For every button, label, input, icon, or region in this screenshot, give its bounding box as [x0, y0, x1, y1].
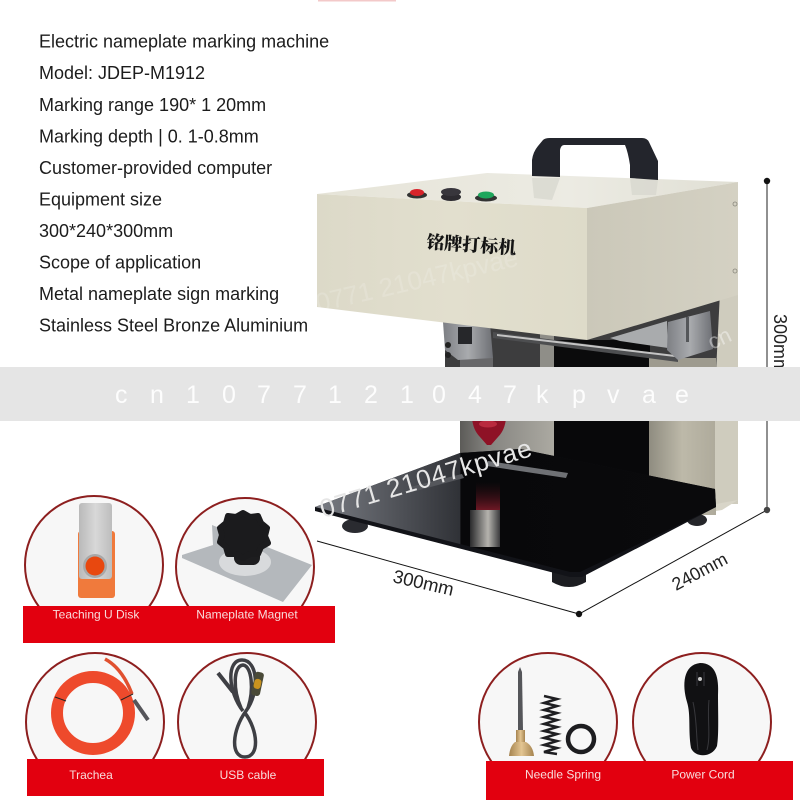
accessory row 2 [26, 653, 324, 796]
specification text block: Electric nameplate marking machine [39, 32, 329, 52]
watermark text: 0771 21047kpvae [316, 432, 536, 524]
dimension lines and labels: 300mm [391, 565, 456, 600]
watermark text: cn [704, 322, 735, 355]
specification text block: Stainless Steel Bronze Aluminium [39, 316, 308, 336]
accessory: USB cable [177, 652, 317, 759]
caption bar: row 3: Power Cord [671, 768, 735, 782]
top edge mark [318, 0, 396, 2]
dimension lines and labels: 240mm [668, 549, 731, 595]
caption bar: row 3 [486, 761, 793, 800]
dimension lines and labels: 300mm [770, 314, 790, 374]
caption bar: row 3: Needle Spring [525, 768, 601, 782]
caption bar: row 1: Nameplate Magnet [196, 608, 298, 622]
base plate [315, 449, 716, 587]
watermark text [313, 242, 735, 524]
accessory: teaching U disk [24, 495, 164, 606]
specification text block [39, 32, 329, 336]
accessory: nameplate magnet [175, 497, 315, 606]
accessory: needle spring [478, 652, 618, 761]
marking head [472, 418, 506, 445]
caption bar: row 1 [23, 606, 335, 643]
specification text block: Customer-provided computer [39, 158, 272, 178]
specification text block: 300*240*300mm [39, 221, 173, 241]
dimension lines and labels [317, 178, 790, 617]
handle [532, 138, 658, 180]
caption bar: row 2: Trachea [69, 768, 113, 782]
watermark band: cn1077121047kpvae [115, 381, 689, 409]
specification text block: Marking range 190* 1 20mm [39, 95, 266, 115]
watermark text: 0771 21047kpvae [313, 242, 521, 318]
control buttons [407, 188, 497, 202]
caption bar: row 1: Teaching U Disk [53, 608, 140, 622]
specification text block: Model: JDEP-M1912 [39, 63, 205, 83]
specification text block: Marking depth | 0. 1-0.8mm [39, 126, 259, 146]
specification text block: Metal nameplate sign marking [39, 284, 279, 304]
machine nameplate text: 铭牌打标机 [426, 228, 517, 260]
upper housing [317, 173, 738, 340]
machine illustration [313, 138, 738, 587]
specification text block: Scope of application [39, 252, 201, 272]
rail mechanism [443, 292, 720, 372]
machine column and interior [460, 290, 738, 515]
watermark band [0, 367, 800, 421]
caption bar: row 2: USB cable [220, 768, 277, 782]
accessory row 3 [479, 653, 793, 800]
accessory: trachea [25, 652, 165, 759]
accessory: power cord [632, 652, 772, 761]
accessory row 1 [23, 496, 335, 643]
specification text block: Equipment size [39, 190, 162, 210]
caption bar: row 2 [27, 759, 324, 796]
